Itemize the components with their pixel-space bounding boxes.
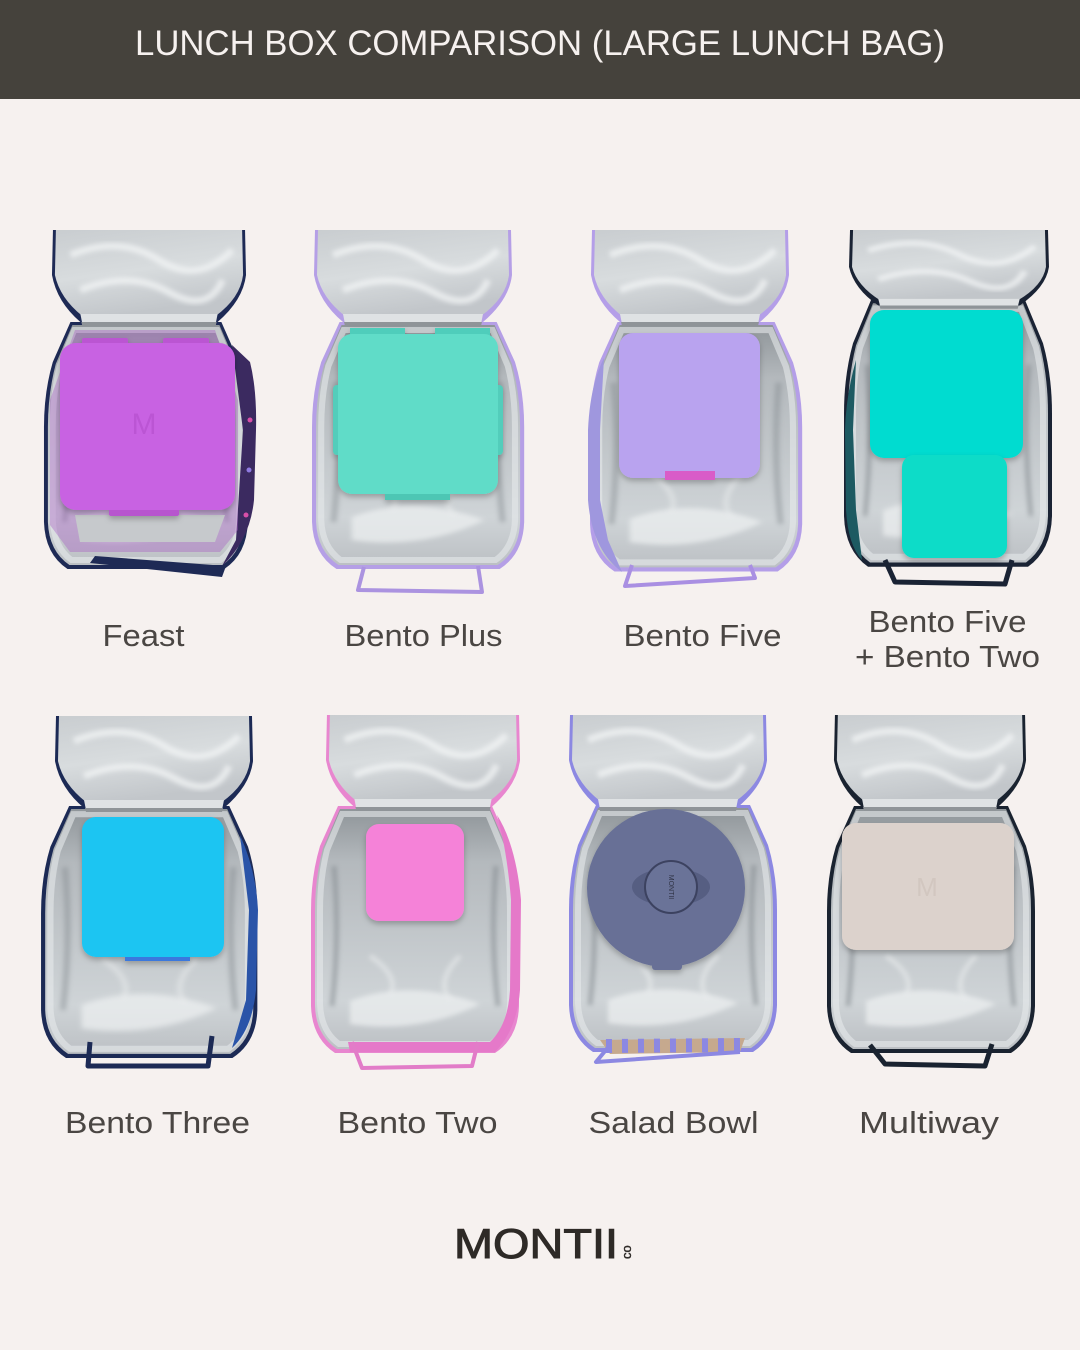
bag handle xyxy=(885,560,1012,584)
title: LUNCH BOX COMPARISON (LARGE LUNCH BAG) xyxy=(135,24,945,63)
logo: MONTII: co xyxy=(619,1245,634,1259)
header band xyxy=(0,0,1080,99)
lunch box: Bento Three xyxy=(82,817,224,961)
bag: Bento Five xyxy=(588,230,802,586)
label: Bento Five + Bento Two: + Bento Two xyxy=(855,639,1040,674)
bag handle xyxy=(88,1036,212,1066)
lid logo text: MONTII xyxy=(667,875,674,899)
label: Bento Five + Bento Two xyxy=(855,604,1040,674)
label: Bento Plus: Bento Plus xyxy=(344,618,502,653)
bag: Feast xyxy=(44,230,256,577)
label: Bento Five: Bento Five xyxy=(624,618,782,653)
bag: Bento Plus xyxy=(312,230,524,592)
bag: Bento Five + Bento Two xyxy=(844,230,1052,584)
label: Salad Bowl: Salad Bowl xyxy=(588,1105,758,1140)
lunch box: Bento Two xyxy=(902,455,1007,558)
logo: MONTII: MONTII xyxy=(454,1220,618,1267)
box emblem: M xyxy=(132,408,156,441)
label: Bento Three: Bento Three xyxy=(65,1105,250,1140)
bag: Bento Three xyxy=(41,716,258,1066)
label: Bento Two: Bento Two xyxy=(338,1105,498,1140)
bag handle xyxy=(358,566,482,592)
bag: Salad Bowl xyxy=(569,715,777,1062)
lunch box: Multiway xyxy=(842,823,1014,950)
bag: Multiway xyxy=(827,715,1035,1066)
bag handle xyxy=(870,1044,992,1066)
lunch box: Bento Five xyxy=(870,310,1023,458)
lunch box: Bento Five xyxy=(619,333,760,480)
label: Bento Five + Bento Two: Bento Five xyxy=(868,604,1026,639)
bag: Bento Two xyxy=(311,715,521,1068)
bag handle xyxy=(625,565,755,586)
label: Multiway: Multiway xyxy=(859,1105,1000,1140)
bag handle xyxy=(352,1042,478,1068)
bag handle xyxy=(596,1045,740,1062)
box emblem: M xyxy=(916,872,938,902)
lunch box: Feast xyxy=(60,338,235,516)
lunch box: Bento Plus xyxy=(333,328,503,500)
lunch box: Bento Two xyxy=(366,824,464,921)
label: Feast: Feast xyxy=(102,618,185,653)
salad bowl lid xyxy=(587,809,745,970)
